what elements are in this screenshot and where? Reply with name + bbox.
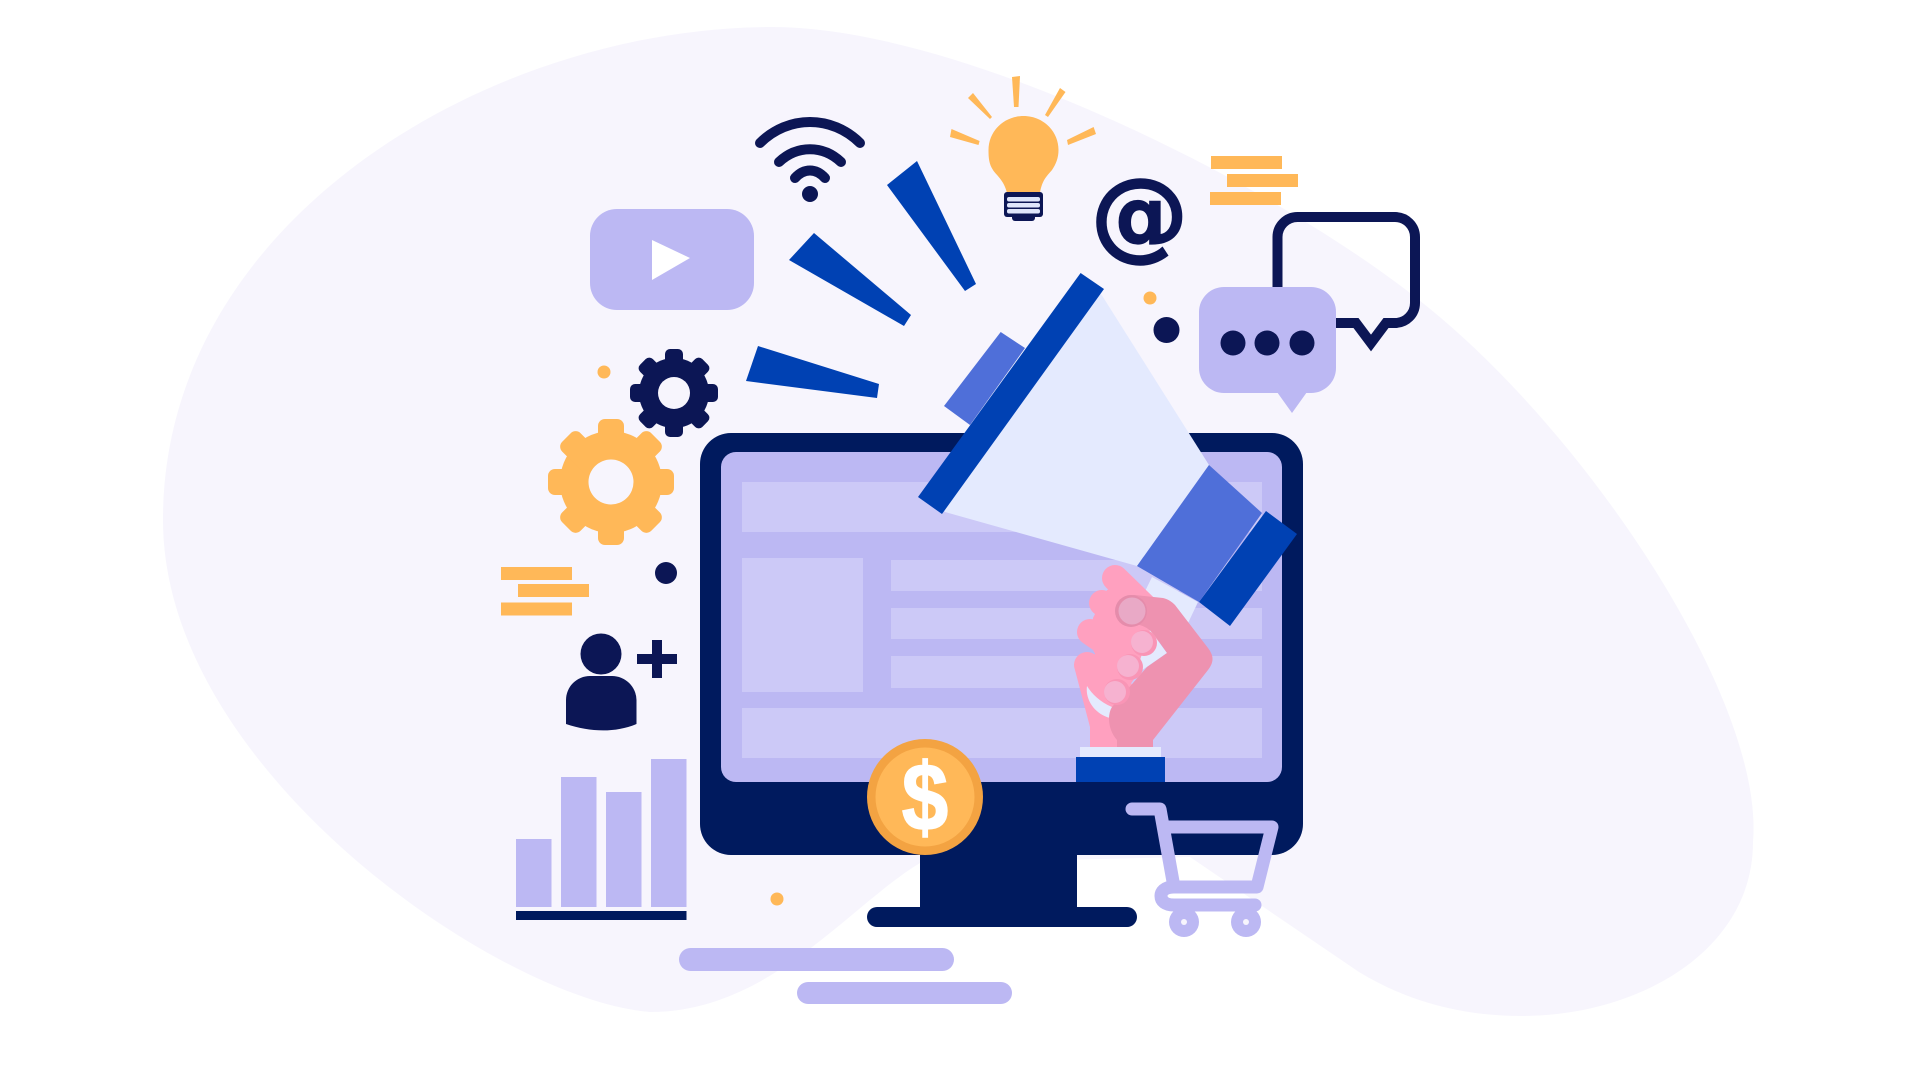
shirt cuff xyxy=(1080,747,1161,757)
monitor stand xyxy=(867,840,1137,927)
fingernail three xyxy=(1104,679,1130,705)
thumb nail xyxy=(1115,595,1147,627)
jacket sleeve xyxy=(1076,757,1165,782)
navy dot near chat xyxy=(1154,317,1180,343)
megaphone back flap xyxy=(944,332,1025,425)
megaphone rear rim xyxy=(1199,511,1297,626)
dollar coin xyxy=(867,739,983,855)
megaphone horn xyxy=(935,285,1209,566)
wifi icon xyxy=(760,122,860,202)
lightbulb icon xyxy=(950,76,1096,221)
finger base fill xyxy=(1093,585,1160,700)
orange dot near chat xyxy=(1144,292,1156,304)
orange text lines left xyxy=(501,567,589,616)
palm xyxy=(1109,595,1212,747)
screen content panels xyxy=(742,482,1262,758)
fingernail two xyxy=(1117,654,1143,680)
dollar coin: $ xyxy=(902,745,948,851)
megaphone xyxy=(918,273,1297,640)
orange text lines right xyxy=(1210,156,1298,205)
outlined speech bubble xyxy=(1278,217,1415,343)
monitor xyxy=(700,433,1303,927)
background blob xyxy=(163,27,1754,1016)
handle gaps behind fingers xyxy=(1087,630,1167,718)
filled speech bubble with dots xyxy=(1199,287,1336,413)
orange dot near gears xyxy=(598,366,610,378)
fingernail one xyxy=(1131,630,1157,656)
video play icon xyxy=(590,209,754,310)
shopping cart xyxy=(1132,809,1272,937)
add user icon xyxy=(566,634,677,730)
monitor body xyxy=(700,433,1303,855)
at sign icon: @ xyxy=(1090,158,1188,272)
fingers xyxy=(1087,578,1150,690)
megaphone handle xyxy=(1135,577,1198,640)
hand holding megaphone xyxy=(1075,578,1212,747)
bottom pill lower xyxy=(797,982,1012,1004)
megaphone sound ray bottom xyxy=(746,346,879,398)
megaphone front rim xyxy=(918,273,1104,514)
megaphone sound ray top xyxy=(887,161,976,291)
navy gear xyxy=(630,349,718,437)
orange gear xyxy=(548,419,674,545)
navy dot left xyxy=(655,562,677,584)
wrist xyxy=(1075,650,1135,747)
megaphone sound ray middle xyxy=(789,233,911,326)
bottom pill top xyxy=(679,948,954,971)
orange dot bottom xyxy=(770,892,784,906)
megaphone body band xyxy=(1137,465,1262,602)
screen xyxy=(721,452,1282,782)
bar chart xyxy=(516,759,686,920)
